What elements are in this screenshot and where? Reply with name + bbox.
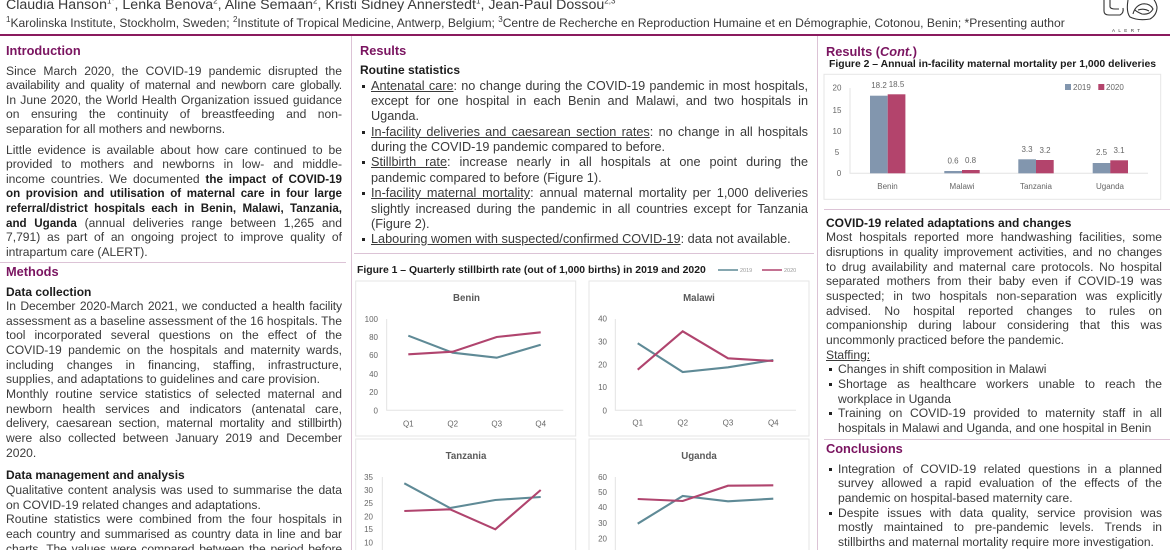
text: introduction second paragraph: and Uganda (annual deliveries range between 1,265 and xyxy=(6,216,342,230)
icon: ALERT logo xyxy=(1103,0,1158,33)
text: data collection: COVID-19 pandemic on the hospitals and maternity wards, xyxy=(6,343,342,357)
legend: figure 1: 2019 xyxy=(740,268,752,274)
text: introduction first paragraph: In June 2020, the World Health Organization issued guidance xyxy=(6,93,342,107)
chart: Figure 2 bar chart: 10 xyxy=(833,127,842,136)
chart: Malawi: Q4 xyxy=(768,418,779,428)
chart: Figure 2 bar chart: 2.5 xyxy=(1096,148,1108,157)
text: COVID-19 adaptations and changes: companionship during labour considering that this was xyxy=(826,318,1162,332)
header rule xyxy=(0,34,1170,36)
chart: Benin: 60 xyxy=(369,351,379,360)
text: COVID-19 adaptations and changes xyxy=(826,216,1162,435)
chart: Figure 2 bar chart: 18.2 xyxy=(871,81,887,90)
chart: Benin: Q2 xyxy=(447,420,459,428)
chart: Benin: 20 xyxy=(369,388,379,397)
text: COVID-19 adaptations and changes: Most hospitals reported more handwashing facilities, some xyxy=(826,230,1162,244)
text: data management and analysis: Routine statistics were combined from the four hospitals in xyxy=(6,512,342,526)
chart: Figure 2 bar chart: 2020 xyxy=(1106,83,1124,92)
text: conclusions bullets: stillbirths and maternal mortality require more investigation. xyxy=(838,535,1154,549)
chart: Malawi: 20 xyxy=(598,360,608,370)
text: COVID-19 adaptations and changes: to drug availability and maternal care protocols. No hospital xyxy=(826,260,1162,274)
chart: Benin: Q4 xyxy=(535,420,547,428)
chart: Benin: Q1 xyxy=(403,420,414,428)
text: conclusions bullets: pandemic on hospital-based maternity care. xyxy=(838,491,1073,505)
text: routine statistics: Routine statistics xyxy=(360,63,460,77)
text: COVID-19 adaptations and changes: hospitals in Malawi and Uganda, and one hospital in Benin xyxy=(838,421,1151,435)
chart: Figure 2 bar chart: 15 xyxy=(833,106,842,115)
text: COVID-19 adaptations and changes: COVID-19 related adaptations and changes xyxy=(826,216,1071,230)
text: data collection: tool incorporated several questions on the effect of the xyxy=(6,328,342,342)
text: conclusions bullets: Integration of COVID-19 related questions in a planned xyxy=(838,462,1162,476)
text: COVID-19 adaptations and changes: Shortage as healthcare workers unable to reach the xyxy=(838,377,1162,391)
text: introduction first paragraph: on ensuring the continuity of breastfeeding and non- xyxy=(6,107,342,121)
text: data collection xyxy=(6,284,342,460)
legend: figure 1: 2020 xyxy=(784,268,796,274)
chart: Figure 2 bar chart: 0.6 xyxy=(947,156,959,166)
text: routine statistics: Uganda. xyxy=(371,109,419,123)
heading: Results: Results xyxy=(360,43,406,58)
text: routine statistics: except for one hospital in each Benin and Malawi, and two hospitals in xyxy=(371,94,808,108)
chart: Benin: Benin xyxy=(453,293,480,304)
chart: Tanzania: 35 xyxy=(364,473,374,482)
text: routine statistics xyxy=(360,63,808,246)
text: introduction second paragraph: Little evidence is available about how care continued to be xyxy=(6,142,342,156)
text: routine statistics: Stillbirth rate: increase nearly in all hospitals at one point during the xyxy=(371,155,808,169)
icon: ALERT logo: ALERT xyxy=(1112,28,1143,33)
text: data collection: were also collected between January 2019 and December xyxy=(6,431,342,445)
text: introduction second paragraph: intrapartum care (ALERT). xyxy=(6,245,148,259)
chart: Figure 2 bar chart: 5 xyxy=(835,148,840,157)
chart: Benin: 100 xyxy=(365,315,379,324)
chart: Benin: 40 xyxy=(369,370,379,379)
text: data management and analysis: Qualitative content analysis was used to summarise the data xyxy=(6,483,342,497)
text: introduction second paragraph xyxy=(6,142,342,259)
chart: Figure 2 bar chart: Malawi xyxy=(950,182,975,191)
text: introduction second paragraph: on provision and utilisation of maternal care in four large xyxy=(6,187,342,200)
chart: Uganda: 40 xyxy=(598,503,608,512)
chart: Malawi: Q1 xyxy=(632,418,644,428)
heading: Methods: Methods xyxy=(6,264,59,279)
chart: Malawi: 30 xyxy=(598,338,608,346)
text: introduction first paragraph: availability and quality of maternal and newborn care globally. xyxy=(6,78,342,92)
chart: Tanzania: 20 xyxy=(364,512,374,522)
text: data collection: In December 2020-March 2021, we conducted a health facility xyxy=(6,299,342,313)
text: data management and analysis: Data management and analysis xyxy=(6,468,185,482)
chart: Figure 2 bar chart: 3.2 xyxy=(1039,146,1051,155)
text: routine statistics: In-facility deliveries and caesarean section rates: no change in all hospitals xyxy=(371,125,808,139)
text: COVID-19 adaptations and changes: separated mothers from their baby even if COVID-19 was xyxy=(826,274,1162,288)
text: COVID-19 adaptations and changes: suspected; in two hospitals non-separation was explicitly xyxy=(826,289,1162,303)
text: conclusions bullets: mostly maintained to pre-pandemic levels. Trends in xyxy=(838,520,1162,534)
chart: Malawi: 0 xyxy=(603,406,608,416)
chart: Figure 2 bar chart: 3.1 xyxy=(1113,146,1125,155)
text: introduction second paragraph: provided to mothers and newborns in low- and middle- xyxy=(6,157,342,171)
chart: Benin: 0 xyxy=(374,406,379,416)
chart: Figure 2 bar chart: 18.5 xyxy=(889,80,905,89)
chart: Malawi: Malawi xyxy=(683,293,715,304)
text: data collection: assessment as a baseline assessment of the 16 hospitals. The xyxy=(6,314,342,328)
chart: Figure 2 bar chart: Tanzania xyxy=(1020,182,1053,191)
heading: Figure 1 title: Figure 1 – Quarterly stillbirth rate (out of 1,000 births) in 2019 and 2020 xyxy=(357,265,706,276)
text: data collection: supplies, and adaptations to guidelines and care provision. xyxy=(6,372,320,386)
text: conclusions bullets xyxy=(829,462,1162,549)
chart: Figure 2 bar chart xyxy=(824,74,1161,199)
chart: Uganda: Uganda xyxy=(681,451,717,462)
chart: Benin xyxy=(356,281,576,436)
text: data management and analysis: each country and summarised as country data in line and bar xyxy=(6,527,342,541)
text: introduction second paragraph: 7,791) as part of an ongoing project to improve quality of xyxy=(6,230,342,244)
chart: Tanzania xyxy=(356,439,576,550)
text: routine statistics: In-facility maternal mortality: annual maternal mortality per 1,000 deliveries xyxy=(371,186,808,200)
text: routine statistics: pandemic compared to before (Figure 1). xyxy=(371,171,602,185)
text: data collection: Data collection xyxy=(6,284,91,298)
chart: Uganda: 50 xyxy=(598,488,608,497)
heading: Results (Cont.): Results (Cont.) xyxy=(826,44,917,58)
text: data collection: newborn health services and indicators (antenatal care, xyxy=(6,402,342,416)
chart: Tanzania: Tanzania xyxy=(446,451,487,462)
chart: Figure 2 bar chart: Uganda xyxy=(1096,182,1125,191)
text: routine statistics: Labouring women with suspected/confirmed COVID-19: data not available. xyxy=(371,232,791,246)
chart: Figure 2 bar chart: 20 xyxy=(833,84,842,92)
chart: Figure 2 bar chart: 3.3 xyxy=(1021,145,1033,154)
chart: Figure 2 bar chart: Benin xyxy=(877,182,898,191)
text: introduction first paragraph: separation for all mothers and newborns. xyxy=(6,122,225,136)
chart: Figure 2 bar chart: 0 xyxy=(837,169,842,178)
chart: Tanzania: 10 xyxy=(364,538,374,548)
text: data collection: including changes in financing, staffing, infrastructure, xyxy=(6,358,342,372)
chart: Uganda: 20 xyxy=(598,534,608,544)
legend: figure 1 xyxy=(718,268,796,274)
chart: Malawi: 10 xyxy=(598,383,608,392)
text: data collection: 2020. xyxy=(6,446,36,460)
chart: Malawi: Q3 xyxy=(723,418,734,428)
text: COVID-19 adaptations and changes: disruptions in quality improvement activities, and no changes xyxy=(826,245,1162,259)
chart: Uganda xyxy=(589,439,809,550)
chart: Malawi: 40 xyxy=(598,314,608,324)
chart: Tanzania: 15 xyxy=(364,525,374,534)
text: routine statistics: during the COVID-19 pandemic compared to before. xyxy=(371,140,665,154)
text: COVID-19 adaptations and changes: Changes in shift composition in Malawi xyxy=(838,362,1046,376)
text: introduction first paragraph xyxy=(6,64,342,136)
chart: Tanzania: 25 xyxy=(364,499,374,508)
text: routine statistics: slightly increased during the pandemic in all countries except for Tanzania xyxy=(371,202,808,216)
text: introduction second paragraph: referral/district hospitals each in Benin, Malawi, Tanzania, xyxy=(6,202,342,215)
text: introduction first paragraph: Since March 2020, the COVID-19 pandemic disrupted the xyxy=(6,64,342,78)
text: routine statistics: Antenatal care: no change during the COVID-19 pandemic in most hospitals, xyxy=(371,79,808,93)
chart: Malawi: Q2 xyxy=(677,418,689,428)
chart: Benin: 80 xyxy=(369,333,379,342)
chart: Malawi xyxy=(589,281,809,436)
text: COVID-19 adaptations and changes: advised. No hospital reported changes to rules on xyxy=(826,304,1162,318)
text: COVID-19 adaptations and changes: Training on COVID-19 provided to maternity staff in all xyxy=(838,406,1162,420)
heading: Figure 2 title: Figure 2 – Annual in-facility maternal mortality per 1,000 deliveries xyxy=(829,59,1156,70)
text: routine statistics: (Figure 2). xyxy=(371,217,430,231)
chart: Figure 2 bar chart: 0.8 xyxy=(965,156,977,165)
text: conclusions bullets: survey allowed a rapid evaluation of the effects of the xyxy=(838,476,1162,490)
text: COVID-19 adaptations and changes: uncommonly practiced before the pandemic. xyxy=(826,333,1064,347)
chart: Tanzania: 30 xyxy=(364,486,374,495)
text: data collection: Monthly routine service statistics of selected maternal and xyxy=(6,387,342,401)
text: COVID-19 adaptations and changes: Staffing: xyxy=(826,348,870,362)
text: data management and analysis xyxy=(6,468,342,550)
text: data collection: delivery, caesarean section, maternal mortality and stillbirth) xyxy=(6,416,342,430)
heading: Conclusions: Conclusions xyxy=(826,441,903,456)
text: introduction second paragraph: income countries. We documented the impact of COVID-19 xyxy=(6,172,342,186)
heading: Introduction: Introduction xyxy=(6,43,81,58)
text: COVID-19 adaptations and changes: workplace in Uganda xyxy=(838,392,951,406)
chart: Figure 2 bar chart: 2019 xyxy=(1073,83,1091,92)
chart: Uganda: 60 xyxy=(598,473,608,482)
chart: Uganda: 30 xyxy=(598,519,608,528)
chart: Benin: Q3 xyxy=(491,420,503,428)
text: conclusions bullets: Despite issues with data quality, service provision was xyxy=(838,506,1162,520)
text: data management and analysis: on COVID-19 related changes and adaptations. xyxy=(6,498,261,512)
